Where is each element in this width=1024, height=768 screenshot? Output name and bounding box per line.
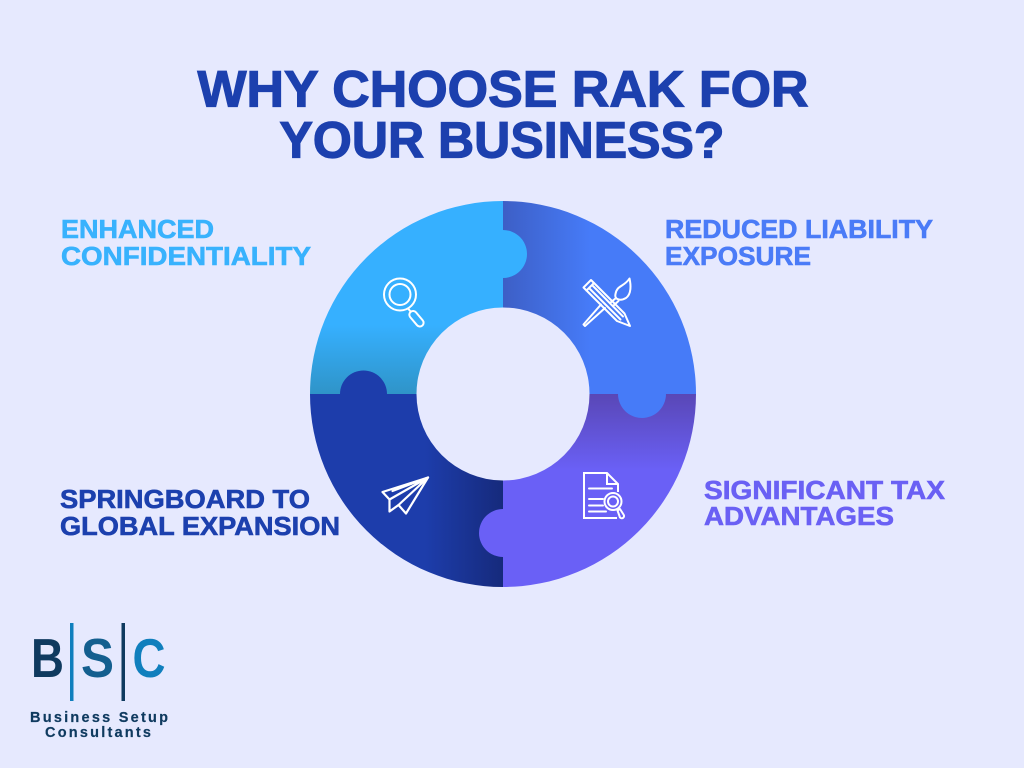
logo caption bbox=[30, 710, 168, 741]
segment: top left light blue bbox=[310, 201, 503, 394]
knob: light blue into blue bbox=[503, 230, 527, 278]
label: reduced liability exposure: EXPOSURE bbox=[665, 243, 811, 271]
logo: Business Setup Consultants bbox=[30, 623, 168, 741]
label: springboard to global expansion bbox=[60, 486, 340, 541]
label: significant tax advantages: ADVANTAGES bbox=[704, 503, 894, 531]
title: WHY CHOOSE RAK FOR bbox=[198, 60, 808, 118]
logo letters bbox=[31, 627, 166, 689]
segment: bottom right purple bbox=[503, 394, 696, 587]
knob: blue into purple bbox=[618, 394, 666, 418]
icon: pencil and brush bbox=[584, 278, 631, 326]
label: enhanced confidentiality: CONFIDENTIALITY bbox=[61, 243, 311, 271]
title bbox=[198, 60, 808, 168]
icon: document with magnifier bbox=[584, 473, 624, 518]
label: significant tax advantages bbox=[704, 477, 945, 531]
label: significant tax advantages: SIGNIFICANT TAX bbox=[704, 477, 945, 505]
logo caption: Consultants bbox=[45, 725, 151, 741]
label: reduced liability exposure bbox=[665, 216, 933, 271]
label: enhanced confidentiality bbox=[61, 216, 311, 271]
title: YOUR BUSINESS? bbox=[280, 112, 724, 168]
segment: bottom left navy bbox=[310, 394, 503, 587]
logo letters: C bbox=[132, 627, 166, 689]
segment: top right blue bbox=[503, 201, 696, 394]
logo dividers bbox=[70, 623, 74, 701]
knob: navy into light blue bbox=[340, 370, 387, 394]
logo letters: B bbox=[31, 627, 64, 689]
label: enhanced confidentiality: ENHANCED bbox=[61, 216, 214, 244]
puzzle ring bbox=[310, 201, 696, 587]
knob: purple into navy bbox=[479, 509, 503, 557]
label: reduced liability exposure: REDUCED LIABILITY bbox=[665, 216, 933, 244]
logo letters: S bbox=[81, 627, 114, 689]
icon: magnifying glass bbox=[384, 278, 425, 328]
label: springboard to global expansion: GLOBAL EXPANSION bbox=[60, 513, 340, 541]
icon: paper plane bbox=[382, 478, 428, 514]
logo caption: Business Setup bbox=[30, 710, 168, 726]
label: springboard to global expansion: SPRINGBOARD TO bbox=[60, 486, 310, 514]
